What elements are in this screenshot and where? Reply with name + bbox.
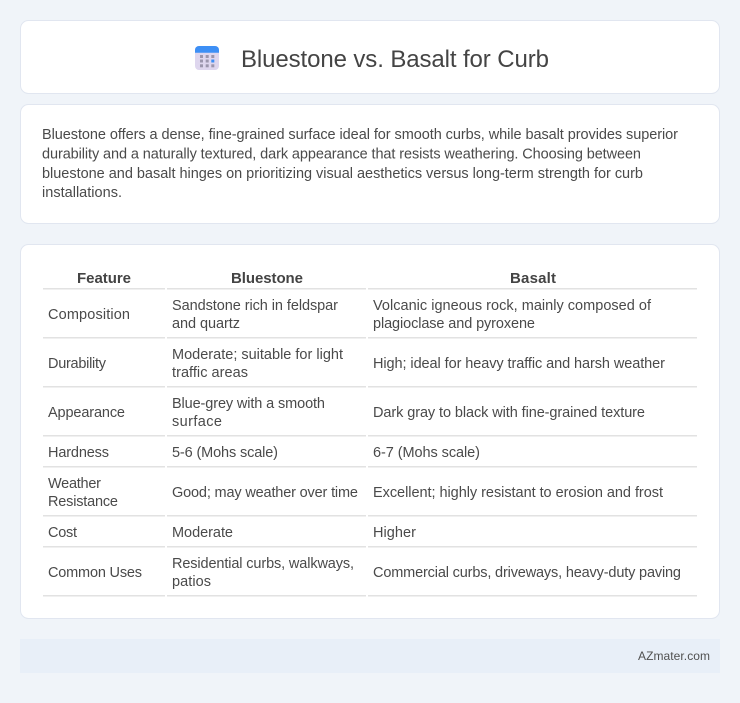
row: appearance: Appearance — [48, 405, 125, 421]
panel: title card — [20, 20, 720, 94]
row: appearance: surface — [172, 414, 222, 430]
row: hardness: 5-6 (Mohs scale) — [172, 445, 278, 461]
table header: Basalt — [510, 270, 556, 287]
summary text: bluestone and basalt hinges on prioritizing visual aesthetics versus long-term strength for curb — [42, 166, 643, 182]
row: common uses — [43, 556, 697, 596]
row: durability — [43, 347, 697, 388]
row: common uses: Common Uses — [48, 565, 142, 581]
row: weather resistance: Excellent; highly resistant to erosion and frost — [373, 485, 663, 501]
footer — [20, 639, 720, 673]
row: composition: Volcanic igneous rock, mainly composed of — [373, 298, 652, 314]
row: common uses: patios — [172, 574, 211, 590]
row: common uses: Residential curbs, walkways, — [172, 556, 354, 572]
row: weather resistance: Weather — [48, 476, 101, 492]
row: weather resistance: Good; may weather over time — [172, 485, 358, 501]
summary text: installations. — [42, 185, 122, 201]
icon: calendar — [195, 46, 219, 70]
row: durability: traffic areas — [172, 365, 248, 381]
title: Bluestone vs. Basalt for Curb — [241, 46, 549, 73]
summary text: durability and a naturally textured, dark appearance that resists weathering. Choosing between — [42, 146, 641, 162]
row: appearance — [43, 396, 697, 436]
panel: comparison table — [20, 244, 720, 618]
row: durability: Moderate; suitable for light — [172, 347, 343, 363]
row: composition: plagioclase and pyroxene — [373, 316, 535, 332]
row: durability: High; ideal for heavy traffic and harsh weather — [373, 356, 665, 372]
row: hardness — [43, 445, 697, 468]
row: composition: and quartz — [172, 316, 240, 332]
row: durability: Durability — [48, 356, 107, 372]
table header — [43, 270, 697, 290]
row: weather resistance: Resistance — [48, 494, 118, 510]
row: cost: Cost — [48, 525, 77, 541]
footer credit: AZmater.com — [638, 649, 710, 663]
row: hardness: Hardness — [48, 445, 109, 461]
row: composition: Sandstone rich in feldspar — [172, 298, 338, 314]
row: cost: Higher — [373, 525, 416, 541]
panel: summary — [20, 104, 720, 224]
row: appearance: Dark gray to black with fine-grained texture — [373, 405, 645, 421]
summary text — [42, 127, 678, 201]
row: common uses: Commercial curbs, driveways, heavy-duty paving — [373, 565, 681, 581]
table header: Bluestone — [231, 270, 303, 287]
row: composition — [43, 298, 697, 338]
table header: Feature — [77, 270, 131, 287]
row: cost — [43, 525, 697, 548]
summary text: Bluestone offers a dense, fine-grained surface ideal for smooth curbs, while basalt provides superior — [42, 127, 678, 143]
row: hardness: 6-7 (Mohs scale) — [373, 445, 480, 461]
row: cost: Moderate — [172, 525, 233, 541]
row: composition: Composition — [48, 307, 130, 323]
row: weather resistance — [43, 476, 697, 516]
row: appearance: Blue-grey with a smooth — [172, 396, 325, 412]
